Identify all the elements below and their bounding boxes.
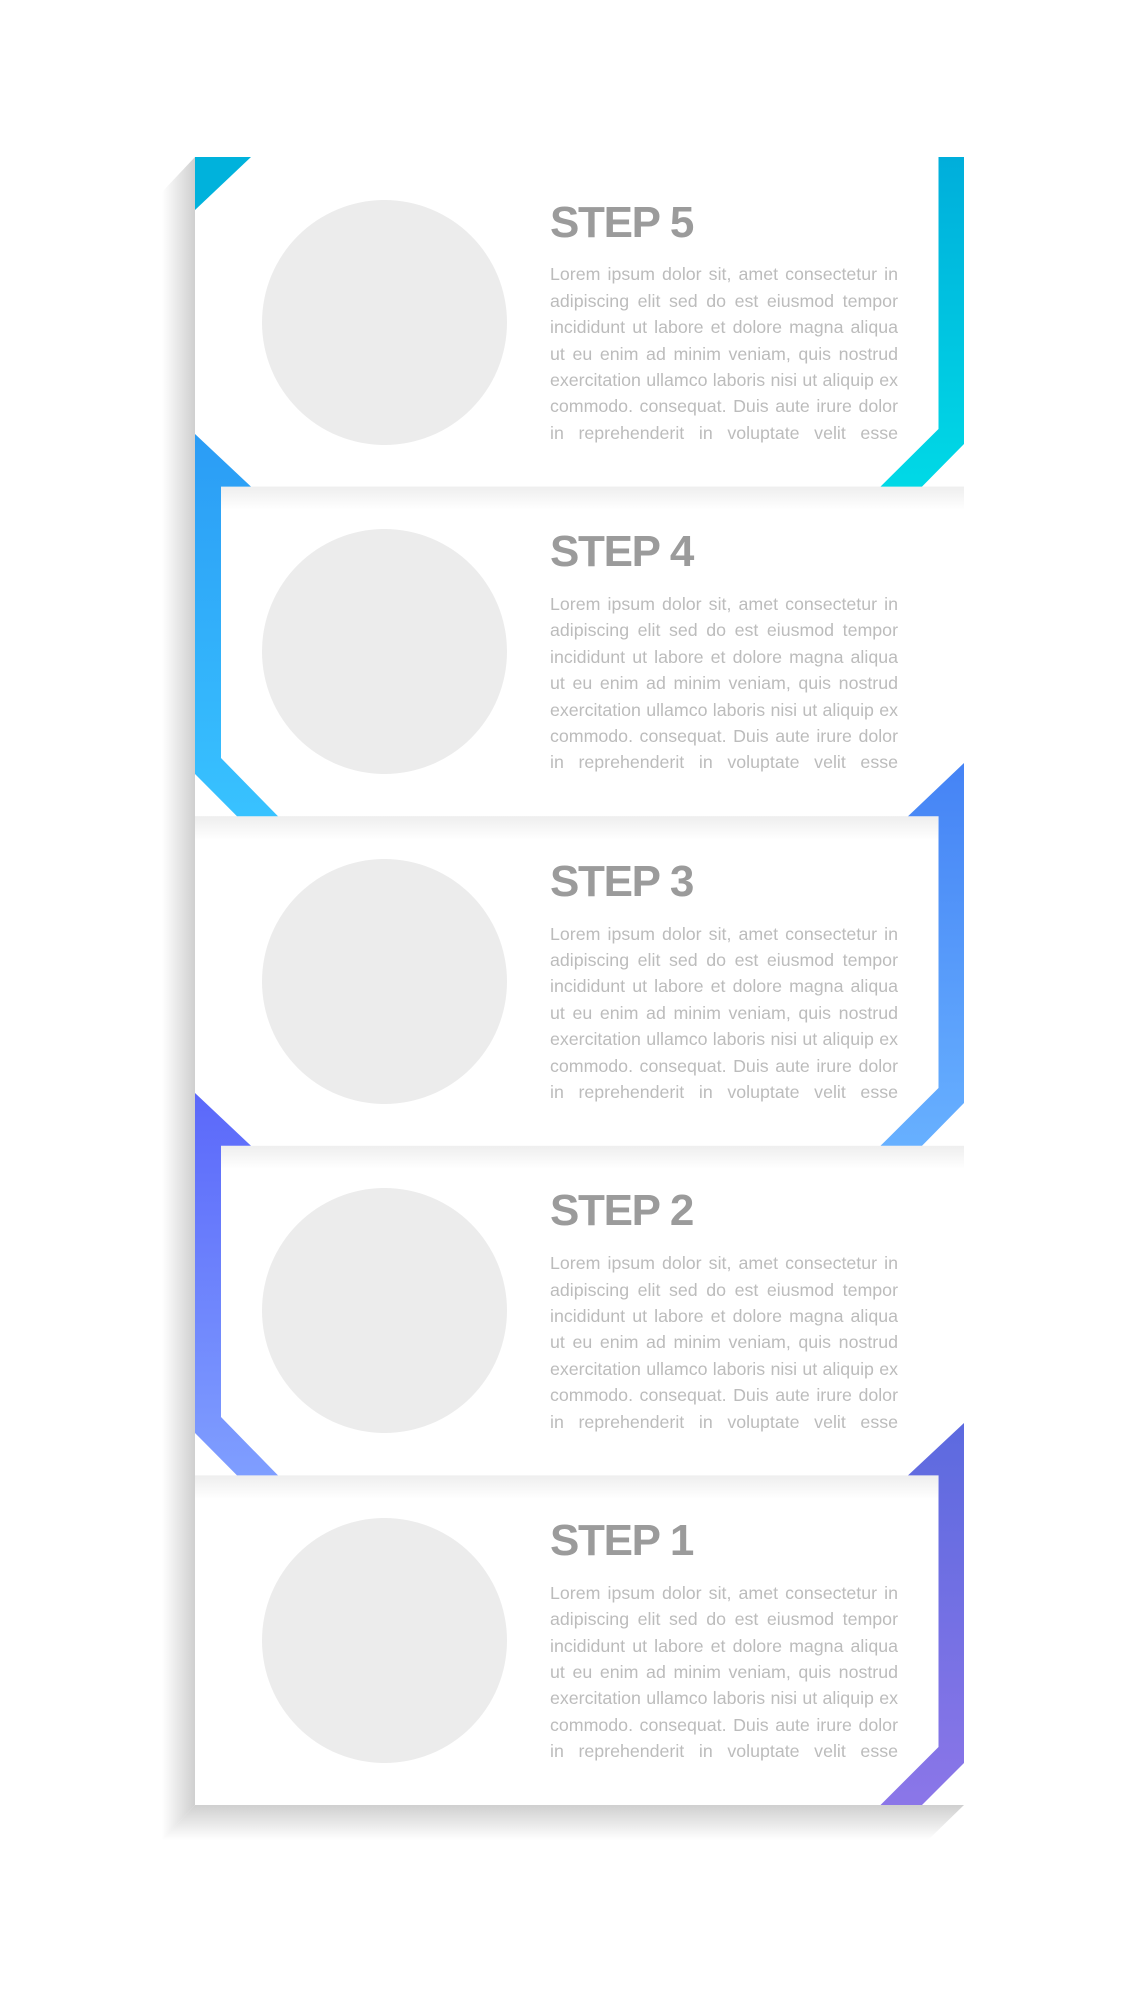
heading: step 1: STEP 1 xyxy=(550,1516,693,1565)
heading: step 5: STEP 5 xyxy=(550,198,693,246)
outer drop shadow xyxy=(162,157,964,1840)
image placeholder circle xyxy=(262,859,507,1104)
body text: incididunt ut labore et dolore magna aliqua xyxy=(550,1636,898,1656)
body text: incididunt ut labore et dolore magna aliqua xyxy=(550,317,898,337)
image placeholder circle xyxy=(262,200,507,444)
panel: step 4 xyxy=(262,527,898,774)
body text: ut eu enim ad minim veniam, quis nostrud xyxy=(550,673,898,693)
image placeholder circle xyxy=(262,1188,507,1433)
body text: commodo. consequat. Duis aute irure dolor xyxy=(550,726,898,746)
body text: Lorem ipsum dolor sit, amet consectetur in xyxy=(550,1583,898,1603)
body text: ut eu enim ad minim veniam, quis nostrud xyxy=(550,1003,898,1023)
body text: exercitation ullamco laboris nisi ut aliquip ex xyxy=(550,700,898,720)
heading: step 3: STEP 3 xyxy=(550,857,693,906)
body text: exercitation ullamco laboris nisi ut aliquip ex xyxy=(550,370,898,390)
panel: step 2 xyxy=(262,1186,898,1433)
panel: step 5 xyxy=(262,198,898,445)
body text: in reprehenderit in voluptate velit esse xyxy=(550,752,898,772)
panel: step 3 xyxy=(262,857,898,1104)
body text: ut eu enim ad minim veniam, quis nostrud xyxy=(550,1662,898,1682)
body text: exercitation ullamco laboris nisi ut aliquip ex xyxy=(550,1359,898,1379)
body text: adipiscing elit sed do est eiusmod tempor xyxy=(550,1280,898,1300)
body text xyxy=(550,1253,898,1432)
body text: exercitation ullamco laboris nisi ut aliquip ex xyxy=(550,1029,898,1049)
body text xyxy=(550,924,898,1102)
body text xyxy=(550,594,898,772)
body text: incididunt ut labore et dolore magna aliqua xyxy=(550,976,898,996)
body text: commodo. consequat. Duis aute irure dolor xyxy=(550,1385,898,1405)
gradient bar: step 4 xyxy=(195,434,278,816)
body text xyxy=(550,1583,898,1761)
body text: commodo. consequat. Duis aute irure dolor xyxy=(550,1715,898,1735)
image placeholder circle xyxy=(262,529,507,774)
body text xyxy=(550,264,898,443)
body text: Lorem ipsum dolor sit, amet consectetur in xyxy=(550,924,898,944)
corner triangle top left xyxy=(195,157,251,210)
body text: incididunt ut labore et dolore magna aliqua xyxy=(550,1306,898,1326)
gradient bar: step 2 xyxy=(195,1093,278,1475)
image placeholder circle xyxy=(262,1518,507,1763)
heading: step 2: STEP 2 xyxy=(550,1186,693,1235)
heading: step 4: STEP 4 xyxy=(550,527,693,576)
body text: in reprehenderit in voluptate velit esse xyxy=(550,423,898,443)
body text: Lorem ipsum dolor sit, amet consectetur in xyxy=(550,1253,898,1273)
body text: ut eu enim ad minim veniam, quis nostrud xyxy=(550,1332,898,1352)
body text: commodo. consequat. Duis aute irure dolor xyxy=(550,396,898,416)
body text: commodo. consequat. Duis aute irure dolor xyxy=(550,1056,898,1076)
body text: Lorem ipsum dolor sit, amet consectetur in xyxy=(550,264,898,284)
body text: adipiscing elit sed do est eiusmod tempor xyxy=(550,291,898,311)
gradient bar: step 5 xyxy=(880,157,964,487)
body text: adipiscing elit sed do est eiusmod tempor xyxy=(550,950,898,970)
gradient bar: step 3 xyxy=(880,763,964,1146)
body text: incididunt ut labore et dolore magna aliqua xyxy=(550,647,898,667)
body text: ut eu enim ad minim veniam, quis nostrud xyxy=(550,344,898,364)
body text: adipiscing elit sed do est eiusmod tempor xyxy=(550,1609,898,1629)
panel: step 1 xyxy=(262,1516,898,1763)
inner panel shadows xyxy=(195,487,964,1499)
body text: Lorem ipsum dolor sit, amet consectetur in xyxy=(550,594,898,614)
gradient bar: step 1 xyxy=(880,1423,964,1805)
body text: in reprehenderit in voluptate velit esse xyxy=(550,1082,898,1102)
body text: in reprehenderit in voluptate velit esse xyxy=(550,1412,898,1432)
body text: exercitation ullamco laboris nisi ut aliquip ex xyxy=(550,1688,898,1708)
body text: in reprehenderit in voluptate velit esse xyxy=(550,1741,898,1761)
body text: adipiscing elit sed do est eiusmod tempor xyxy=(550,620,898,640)
